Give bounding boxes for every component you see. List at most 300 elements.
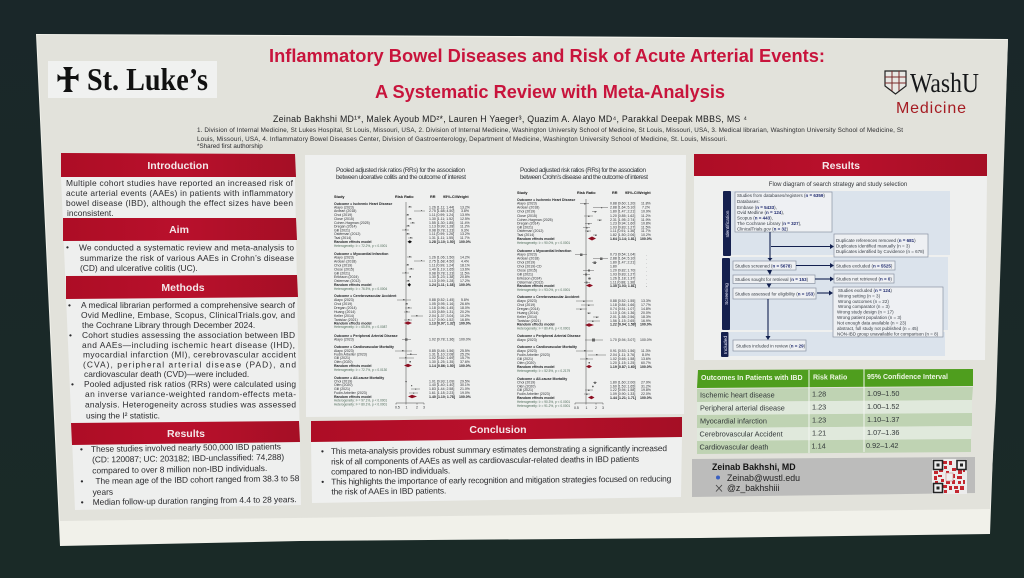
table rows: 0.92–1.42	[866, 441, 898, 450]
outcome: cardiovascular mortality: 8.0%	[642, 353, 650, 357]
table: outcomes in patients with IBD	[697, 369, 973, 454]
text: methods body: Pooled adjusted risk ratios (RRs) were calculated using	[84, 379, 296, 389]
outcome: all-cause mortality: 1.44 [1.21; 1.71]	[610, 396, 636, 400]
contact name: Zeinab Bakhshi, MD	[712, 462, 796, 472]
outcome: all-cause mortality: Heterogeneity: I² = 90.3%, p < 0.0001	[517, 400, 570, 404]
outcome: cardiovascular mortality: 15.7%	[460, 356, 470, 360]
table rows: Ischemic heart disease	[700, 390, 775, 400]
outcome: all-cause mortality: 1.40 [1.40; 1.40]	[429, 383, 454, 387]
outcome: myocardial infarction: 2.88 [1.64; 5.10]	[610, 256, 635, 260]
text: methods body: analysis. Heterogeneity across studies was assessed	[85, 400, 296, 410]
table header: Study	[334, 195, 345, 199]
outcome: all-cause mortality	[517, 377, 653, 408]
outcome: cerebrovascular accident: Outcome = Cerebrovascular Accident	[334, 294, 397, 298]
outcome: myocardial infarction: 1.80	[610, 264, 617, 268]
stage labels: Identification	[725, 210, 731, 237]
outcome: cardiovascular mortality: 100.0%	[459, 364, 472, 368]
flow box text: Studies screened (n = 5678)	[735, 264, 792, 268]
stage labels: Included	[723, 336, 729, 354]
text: results left body: years	[92, 487, 113, 497]
outcome: myocardial infarction: 1.80 [1.47; 2.21]	[610, 260, 635, 264]
outcome: ischemic heart disease: Alayo (2023)	[334, 205, 354, 209]
outcome: ischemic heart disease: Alayo (2023)	[517, 202, 537, 206]
outcome: myocardial infarction: Alayo (2023)	[334, 255, 354, 259]
table header: Outcomes In Patients with IBD	[701, 375, 803, 382]
text: conclusion body: risk of all components of AAEs as well as cardiovascular-related deaths in IBD patients	[331, 454, 639, 466]
outcome: peripheral arterial disease	[334, 334, 471, 342]
table rows: 1.28	[812, 390, 826, 398]
outcome: myocardial infarction: Osterman (2012)	[517, 280, 543, 284]
outcome: cerebrovascular accident: Keller (2014)	[334, 314, 354, 318]
outcome: all-cause mortality: 1.61 [1.18; 2.23]	[429, 391, 454, 395]
outcome: ischemic heart disease: Cohen-Hagman (2025)	[334, 221, 370, 225]
outcome: all-cause mortality: 19.8%	[641, 388, 651, 392]
table rows: Peripheral arterial disease	[700, 404, 785, 412]
outcome: cerebrovascular accident: Huang (2014)	[334, 310, 355, 314]
flow box text: Studies excluded (n = 5525)	[836, 264, 893, 268]
outcome: myocardial infarction: Eriksson (2024)	[334, 275, 359, 279]
outcome: myocardial infarction	[334, 252, 472, 291]
outcome: myocardial infarction: Close (2015)	[334, 267, 354, 271]
outcome: all-cause mortality: 29.5%	[460, 380, 470, 384]
reference line and axis	[395, 202, 425, 410]
outcome: cerebrovascular accident: 1.56 [1.15; 2.65]	[610, 319, 635, 323]
outcome: cardiovascular mortality: Random effects model	[517, 365, 555, 369]
outcome: myocardial infarction: Close (2015)	[517, 268, 537, 272]
table rows: 1.07–1.36	[867, 428, 899, 437]
panel: introduction	[61, 153, 296, 218]
logo: WashU Medicine	[885, 68, 979, 117]
outcome: myocardial infarction: Random effects model	[517, 284, 555, 288]
outcome: cerebrovascular accident: 1.03 [0.89; 1.31]	[429, 310, 454, 314]
outcome: cerebrovascular accident: Random effects model	[334, 321, 372, 325]
outcome: peripheral arterial disease: Alayo (2023)	[517, 338, 537, 342]
outcome: all-cause mortality: 31.2%	[641, 384, 651, 388]
outcome: myocardial infarction: Ardean (2018)	[517, 256, 539, 260]
text: methods body: •	[69, 330, 72, 340]
outcome: ischemic heart disease: Dregan (2014)	[517, 222, 540, 226]
outcome: ischemic heart disease: Ardean (2018)	[517, 206, 539, 210]
heading: results left: Results	[167, 428, 205, 440]
text: results left body: •	[80, 476, 83, 486]
outcome: myocardial infarction: 1.30 [1.23; 1.38]	[429, 275, 454, 279]
outcome: cardiovascular mortality: Fudin Arbeiter (2023)	[334, 352, 367, 356]
outcome: all-cause mortality: Fudin Arbeiter (2023)	[517, 392, 550, 396]
outcome: cerebrovascular accident: 0.88 [0.52; 1.55]	[610, 299, 635, 303]
flow box text: Embase (n = 5433),	[737, 205, 777, 210]
table header: 95%-CI	[443, 195, 456, 199]
outcome: myocardial infarction: Random effects model	[334, 283, 372, 287]
outcome: cardiovascular mortality: Gill (2021)	[517, 357, 533, 361]
table header: Risk Ratio	[577, 191, 596, 195]
text: aim body	[66, 242, 294, 273]
outcome: all-cause mortality: 1.22 [0.94; 1.58]	[610, 388, 635, 392]
heading: results right	[694, 154, 987, 176]
authors and affiliations: Louis, Missouri, USA, 4. Inflammatory Bowel Diseases Center, Division of Gastroenterology, Department of Medicine, Washington University School of Medicine, St. Louis, Missouri.	[197, 136, 727, 143]
outcome: myocardial infarction: 1.26 [1.18; 1.37]	[610, 276, 635, 280]
outcome: peripheral arterial disease: 1.70 [0.94; 3.07]	[610, 338, 635, 342]
outcome: cardiovascular mortality: 0.85 [0.46; 1.56]	[429, 349, 454, 353]
reference line and axis: 1	[586, 406, 588, 410]
text: aim body: •	[66, 242, 69, 252]
text: methods body: A medical librarian performed a comprehensive search of	[81, 300, 296, 310]
QR code	[932, 459, 967, 494]
flow arrows	[766, 232, 834, 340]
text: aim body: We conducted a systematic review and meta-analysis to	[79, 242, 294, 252]
outcome: myocardial infarction	[517, 249, 647, 292]
outcome: myocardial infarction: Heterogeneity: I² = 76.5%, p = 0.0004	[334, 287, 387, 291]
outcome: ischemic heart disease: Osterman (2012)	[517, 229, 543, 233]
flow box text: Wrong study design (n = 17)	[837, 310, 894, 314]
outcome: cerebrovascular accident: 16.9%	[641, 319, 651, 323]
outcome: ischemic heart disease: Cohen-Hagman (2025)	[517, 218, 553, 222]
outcome: cerebrovascular accident: 13.3%	[641, 299, 651, 303]
contact handle: @z_bakhshiii	[727, 483, 779, 493]
text: methods body: Ovid Medline, Embase, Scopus, ClinicalTrials.gov, and	[81, 310, 295, 320]
outcome: cerebrovascular accident: Alayo (2023)	[334, 298, 354, 302]
flow box text: Studies sought for retrieval (n = 153)	[735, 277, 809, 282]
text: introduction body: bowel disease (IBD), although the effect sizes have been	[66, 198, 293, 208]
heading: results left	[71, 421, 300, 445]
table rows: 1.23	[812, 402, 826, 412]
outcome: all-cause mortality: 30.1%	[460, 383, 470, 387]
outcome: cerebrovascular accident: Outcome = Cerebrovascular Accident	[517, 295, 580, 299]
outcome: ischemic heart disease: Random effects model	[334, 240, 372, 244]
table header	[517, 191, 651, 195]
panel: aim	[63, 218, 297, 273]
outcome: ischemic heart disease: 13.2%	[460, 232, 470, 236]
outcome: cerebrovascular accident: 10.2%	[460, 314, 470, 318]
stage labels	[721, 191, 731, 357]
outcome: ischemic heart disease: 9.3%	[461, 228, 469, 232]
outcome: cardiovascular mortality: 60.7%	[641, 361, 651, 365]
text: methods body	[68, 300, 297, 420]
table header: Study	[517, 191, 528, 195]
flow box text: Databases:	[737, 199, 760, 204]
outcome: ischemic heart disease: 1.80 [1.47; 2.21]	[610, 210, 635, 214]
outcome: ischemic heart disease: 11.9%	[641, 218, 651, 222]
outcome: ischemic heart disease: 7.2%	[642, 206, 650, 210]
outcome: all-cause mortality	[334, 376, 472, 406]
table rows: 1.23	[812, 416, 826, 424]
outcome: ischemic heart disease: Random effects model	[517, 237, 555, 241]
outcome: myocardial infarction: 0.98 [0.78; 1.23]	[429, 271, 454, 275]
outcome: myocardial infarction: 2.75 [1.68; 4.50]	[429, 259, 454, 263]
authors and affiliations: Zeinab Bakhshi MD¹*, Malek Ayoub MD²*, Lauren H Yaeger³, Quazim A. Alayo MD⁴, Parakkal Deepak MBBS, MS ⁴	[273, 114, 747, 124]
title: Inflammatory Bowel Diseases and Risk of Acute Arterial Events:	[269, 46, 825, 66]
outcome: peripheral arterial disease: 100.0%	[640, 338, 652, 342]
heading: conclusion: Conclusion	[469, 424, 527, 436]
outcome: all-cause mortality: Outcome = All-cause Mortality	[334, 376, 384, 380]
outcome: myocardial infarction: Heterogeneity: I² = 93.0%, p < 0.0001	[517, 288, 570, 292]
heading: results right: Results	[822, 160, 860, 172]
flow box text: Wrong patient population (n = 3)	[837, 315, 902, 320]
outcome: cardiovascular mortality: Outcome = Cardiovascular Mortality	[517, 345, 577, 349]
outcome: all-cause mortality: 21.0%	[460, 387, 470, 391]
text: introduction body: inconsistent.	[67, 208, 114, 218]
table header: Weight	[456, 195, 469, 199]
outcome: myocardial infarction: 0.73 [0.54; 1.04]	[610, 252, 635, 256]
table header: RR	[612, 191, 618, 195]
outcome: ischemic heart disease: 1.11 [0.99; 1.24]	[429, 213, 454, 217]
outcome: ischemic heart disease: Ardean (2018)	[334, 209, 356, 213]
outcome: cerebrovascular accident: 26.6%	[460, 302, 470, 306]
outcome: ischemic heart disease	[517, 198, 653, 245]
outcome: cerebrovascular accident: 17.7%	[641, 303, 651, 307]
outcome: cerebrovascular accident: 1.18 [0.84; 1.66]	[610, 303, 635, 307]
flow box text: Ovid Medline (n = 124),	[737, 210, 784, 215]
outcome: cerebrovascular accident: 1.10 [1.04; 1.36]	[610, 311, 635, 315]
outcome: myocardial infarction: .	[646, 264, 647, 268]
flow box text: ClinicalTrials.gov (n = 32)	[737, 226, 788, 232]
logo: WashU Medicine: Medicine	[896, 100, 966, 117]
outcome: ischemic heart disease: 1.28 [1.10; 1.50]	[429, 240, 455, 244]
outcome: ischemic heart disease: 13.2%	[460, 205, 470, 209]
outcome: cerebrovascular accident: Choi (2019)	[517, 303, 535, 307]
outcome: myocardial infarction: Gill (2021)	[334, 271, 350, 275]
flow diagram	[721, 182, 950, 357]
panel: methods	[66, 275, 298, 420]
outcome: myocardial infarction: .	[646, 276, 647, 280]
outcome: myocardial infarction: 1.11 [0.99; 1.24]	[429, 263, 454, 267]
outcome: cardiovascular mortality: Fudin Arbeiter (2023)	[517, 353, 550, 357]
chart title: between Crohn’s disease and the outcome of interest	[520, 174, 648, 181]
outcome: myocardial infarction: 1.40 [1.19; 1.65]	[429, 267, 454, 271]
outcome: ischemic heart disease: 1.20 [0.85; 1.62]	[610, 214, 635, 218]
text: conclusion body: •	[321, 477, 324, 487]
chart title: Pooled adjusted risk ratios (RRs) for the association	[520, 167, 646, 174]
outcome: cerebrovascular accident: 100.0%	[459, 321, 472, 325]
outcome: cardiovascular mortality: 1.30 [1.25; 1.35]	[429, 360, 454, 364]
outcome: myocardial infarction: Gill (2021)	[517, 272, 533, 276]
table rows: 1.09–1.50	[867, 389, 899, 398]
outcome: ischemic heart disease: Tsai (2014)	[334, 236, 351, 240]
outcome: cerebrovascular accident: 18.3%	[641, 315, 651, 319]
outcome: myocardial infarction: Eriksson (2024)	[517, 276, 542, 280]
outcome: ischemic heart disease: 11.7%	[460, 236, 470, 240]
outcome: cerebrovascular accident: 2.01 [1.58; 2.56]	[610, 315, 635, 319]
text: conclusion body: This highlights the importance of early recognition and mitigation strategies focused on reducing	[331, 474, 672, 486]
outcome: myocardial infarction: Choi (2019)	[517, 260, 535, 264]
table rows: Cardiovascular death	[700, 442, 768, 452]
outcome: all-cause mortality: Gill (2021)	[517, 388, 533, 392]
outcome: ischemic heart disease: 3.8%	[461, 209, 469, 213]
outcome: all-cause mortality: 1.09 [0.90; 1.33]	[610, 392, 635, 396]
outcome: myocardial infarction: .	[646, 284, 647, 288]
outcome: cardiovascular mortality	[334, 345, 472, 372]
text: results left body: (CD: 120087; UC: 203182; IBD-unclassified: 74,288)	[92, 452, 284, 464]
table rows	[697, 369, 973, 454]
outcome: cerebrovascular accident: 20.0%	[641, 311, 651, 315]
authors and affiliations: *Shared first authorship	[197, 143, 263, 150]
outcome: cardiovascular mortality: 25.5%	[460, 349, 470, 353]
outcome: cardiovascular mortality: 25.2%	[460, 352, 470, 356]
outcome: cardiovascular mortality: Outcome = Cardiovascular Mortality	[334, 345, 394, 349]
outcome: peripheral arterial disease: 100.0%	[459, 338, 471, 342]
table rows: 1.21	[812, 428, 826, 438]
outcome: cerebrovascular accident: Heterogeneity: I² = 65.8%, p = 0.0087	[334, 325, 387, 329]
outcome: all-cause mortality: Heterogeneity: I² = 80.1%, p < 0.0001	[334, 402, 387, 406]
text: methods body: Cohort studies assessing the association between IBD	[82, 330, 295, 340]
outcome: ischemic heart disease: 2.75 [1.68; 4.50]	[429, 209, 454, 213]
authors and affiliations	[197, 114, 903, 150]
outcome: myocardial infarction: 14.2%	[460, 255, 470, 259]
outcome: myocardial infarction: 13.6%	[460, 267, 470, 271]
contact email: Zeinab@wustl.edu	[727, 473, 800, 483]
outcome: all-cause mortality: 100.0%	[640, 396, 653, 400]
outcome: cardiovascular mortality: Gill (2021)	[334, 356, 350, 360]
outcome: ischemic heart disease: 11.7%	[641, 229, 651, 233]
outcome: cardiovascular mortality: 1.02 [0.62; 1.69]	[429, 356, 454, 360]
outcome: ischemic heart disease: 100.0%	[459, 240, 472, 244]
outcome: cardiovascular mortality: Olén (2020)	[517, 361, 535, 365]
outcome: all-cause mortality: Random effects model	[517, 396, 555, 400]
outcome: myocardial infarction: .	[646, 256, 647, 260]
outcome: ischemic heart disease: 2.31 [1.95; 2.74]	[610, 218, 635, 222]
table header: Risk Ratio	[395, 195, 414, 199]
outcome: cerebrovascular accident: Alayo (2023)	[517, 299, 537, 303]
text: results left body: •	[80, 444, 83, 454]
text: results left body: These studies involved nearly 500,000 IBD patients	[91, 441, 281, 454]
outcome: ischemic heart disease: 13.9%	[460, 213, 470, 217]
outcome: cardiovascular mortality: 1.02 [0.65; 1.58]	[610, 357, 635, 361]
text: results left body: Median follow-up duration ranging from 4.4 to 28 years.	[93, 494, 297, 507]
reference line and axis: 0.5	[574, 406, 579, 410]
flow title: Flow diagram of search strategy and study selection	[769, 182, 907, 188]
outcome: peripheral arterial disease: 1.02 [0.78; 1.36]	[429, 338, 454, 342]
outcome: ischemic heart disease: Choi (2019)	[334, 213, 352, 217]
panel: contact	[692, 457, 975, 497]
outcome: cerebrovascular accident	[334, 294, 472, 329]
outcome: cardiovascular mortality: 13.6%	[641, 357, 651, 361]
outcome: cardiovascular mortality	[517, 345, 653, 373]
text: conclusion body: •	[321, 446, 324, 456]
text: results left body: The mean age of the IBD cohort ranged from 38.3 to 58	[95, 473, 300, 486]
flow box text: Scopus (n = 443),	[737, 216, 773, 220]
outcome: all-cause mortality: 19.0%	[460, 391, 470, 395]
outcome: cardiovascular mortality: 1.31 [1.10; 2.08]	[429, 352, 454, 356]
outcome: all-cause mortality: Random effects model	[334, 395, 372, 399]
text: methods body: and AAEs—including ischemic heart disease (IHD),	[82, 340, 295, 350]
table header: RR	[430, 195, 436, 199]
outcome: cerebrovascular accident: 0.74 [0.51; 1.07]	[610, 307, 635, 311]
outcome: all-cause mortality: 27.9%	[641, 380, 651, 384]
text: introduction body: Multiple cohort studies have reported an increased risk of	[66, 178, 294, 188]
outcome: ischemic heart disease: 100.0%	[640, 237, 653, 241]
outcome: myocardial infarction: 1.20 [0.82; 1.70]	[610, 268, 635, 272]
flow box text: Wrong setting (n = 3)	[838, 294, 881, 298]
outcome: cardiovascular mortality: Random effects model	[334, 364, 372, 368]
reference line and axis	[574, 199, 604, 410]
panel: forest plots	[305, 155, 686, 417]
flow box text	[735, 193, 939, 348]
panel: results right	[694, 154, 987, 360]
text: methods body: using the I² statistic.	[86, 410, 160, 420]
logo: St. Luke's: St. Luke’s	[87, 61, 208, 97]
outcome: ischemic heart disease: 1.55 [1.30; 1.85]	[429, 221, 454, 225]
outcome: ischemic heart disease: Heterogeneity: I² = 72.2%, p < 0.0001	[334, 244, 387, 248]
stage bands	[729, 191, 950, 356]
reference line and axis: 1	[406, 406, 408, 410]
outcome: myocardial infarction: Ardean (2018)	[334, 259, 356, 263]
flow box text: Duplicate references removed (n = 681)	[836, 238, 916, 243]
outcome: ischemic heart disease: Dregan (2014)	[334, 224, 357, 228]
outcome: cardiovascular mortality: 37.6%	[460, 360, 470, 364]
outcome: all-cause mortality: 1.01 [0.93; 1.09]	[429, 380, 454, 384]
text: conclusion body	[321, 443, 672, 497]
text: conclusion body: This meta-analysis provides robust summary estimates demonstrating a significantly increased	[331, 443, 667, 456]
outcome: cerebrovascular accident: Dregan (2014)	[334, 306, 357, 310]
outcome: myocardial infarction: .	[646, 272, 647, 276]
outcome: ischemic heart disease: 1.03 [0.83; 1.27]	[610, 226, 635, 230]
outcome: myocardial infarction: 17.2%	[460, 279, 470, 283]
heading: aim	[63, 218, 297, 241]
outcome: cerebrovascular accident: 5.8%	[461, 298, 469, 302]
text: results left body	[80, 441, 300, 507]
outcome: ischemic heart disease: 1.26 [1.11; 1.44]	[429, 205, 454, 209]
outcome: cerebrovascular accident: Choi (2019)	[334, 302, 352, 306]
outcome: ischemic heart disease: 10.9%	[641, 210, 651, 214]
outcome: all-cause mortality: Fudin Arbeiter (2023)	[334, 391, 367, 395]
text: methods body: •	[68, 300, 71, 310]
outcome: all-cause mortality: 22.0%	[641, 392, 651, 396]
flow box text: Studies excluded (n = 124)	[838, 288, 892, 293]
outcome: ischemic heart disease: 11.2%	[641, 214, 651, 218]
outcome: cardiovascular mortality: 0.91 [0.53; 1.56]	[610, 349, 635, 353]
outcome: ischemic heart disease: 2.88 [1.64; 5.10]	[610, 206, 635, 210]
panel: results left	[71, 421, 300, 507]
outcome: ischemic heart disease: Close (2015)	[517, 214, 537, 218]
outcome: all-cause mortality: Heterogeneity: I² = 91.2%, p < 0.0001	[517, 404, 570, 408]
table rows: 1.10–1.37	[867, 415, 899, 424]
authors and affiliations: 1. Division of Internal Medicine, St Lukes Hospital, St Louis, Missouri, USA, 2. Division of Internal Medicine, Washington University School of Medicine, St Louis, Missouri, USA, 3. Medical librarian, Washington University School of Medicine, St	[197, 127, 903, 134]
text: conclusion body: the risk of AAEs in IBD patients.	[331, 485, 446, 496]
reference line and axis: 3	[423, 406, 425, 410]
outcome: ischemic heart disease: 11.4%	[460, 221, 470, 225]
outcome: cerebrovascular accident: 1.13 [0.97; 1.32]	[429, 321, 455, 325]
outcome: all-cause mortality: 1.60 [1.53; 1.65]	[610, 384, 635, 388]
outcome: peripheral arterial disease: Outcome = Peripheral Arterial Disease	[517, 334, 581, 338]
outcome: cardiovascular mortality: Alayo (2023)	[517, 349, 537, 353]
outcome: myocardial infarction: 1.26 [1.06; 1.50]	[429, 255, 454, 259]
outcome: cerebrovascular accident: Random effects model	[517, 322, 555, 326]
outcome: peripheral arterial disease	[517, 334, 652, 342]
table rows: Myocardial infarction	[700, 416, 767, 426]
outcome: cerebrovascular accident: Tanislav (2021)	[334, 318, 358, 322]
table header: Risk Ratio	[813, 374, 847, 382]
outcome: ischemic heart disease: Tsai (2014)	[517, 233, 534, 237]
outcome: cerebrovascular accident: Tanislav (2021)	[517, 319, 541, 323]
outcome: myocardial infarction: Choi (2019)-CD	[517, 264, 542, 268]
outcome: cerebrovascular accident	[517, 295, 653, 330]
outcome: ischemic heart disease: 1.11 [0.91; 1.36]	[610, 229, 635, 233]
outcome: myocardial infarction: .	[646, 268, 647, 272]
outcome: myocardial infarction: 4.4%	[461, 259, 469, 263]
panel: conclusion	[311, 417, 682, 503]
outcome: ischemic heart disease: 12.5%	[460, 217, 470, 221]
chart: forest plot ulcerative colitis	[334, 167, 472, 410]
outcome: myocardial infarction: 11.5%	[460, 271, 470, 275]
outcome: ischemic heart disease: Outcome = Ischemic Heart Disease	[517, 198, 575, 202]
heading: aim: Aim	[169, 224, 189, 236]
outcome: cerebrovascular accident: 0.88 [0.52; 1.45]	[429, 298, 454, 302]
outcome: ischemic heart disease: Gill (2021)	[517, 226, 533, 230]
outcome: myocardial infarction: 1.03 [0.83; 1.27]	[610, 272, 635, 276]
outcome: cardiovascular mortality: 1.19 [0.87; 1.60]	[610, 365, 636, 369]
outcome: cerebrovascular accident: 1.18 [0.96; 1.45]	[429, 306, 454, 310]
outcome: cerebrovascular accident: Huang (2014)	[517, 311, 538, 315]
outcome: ischemic heart disease: Gill (2021)	[334, 228, 350, 232]
